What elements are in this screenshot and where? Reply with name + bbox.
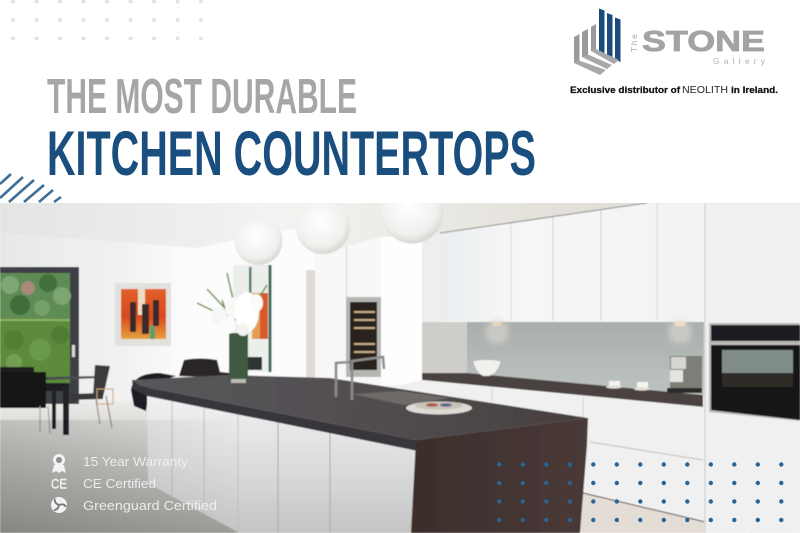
warranty label: 15 Year Warranty bbox=[83, 454, 189, 469]
back wall bbox=[0, 234, 62, 267]
bowl bbox=[473, 360, 501, 376]
second painting behind flowers bbox=[233, 265, 272, 372]
CE label: CE Certified bbox=[83, 476, 156, 491]
logo wordmark: STONE bbox=[642, 26, 765, 58]
pendant lamps bbox=[234, 203, 442, 266]
distributor tagline bbox=[570, 85, 778, 96]
distributor tagline: Exclusive distributor of bbox=[570, 85, 681, 96]
distributor tagline: in Ireland. bbox=[731, 85, 778, 96]
island base cabinets bbox=[147, 394, 416, 533]
logo: The Stone Gallery bbox=[570, 8, 778, 96]
waterfall end panel bbox=[411, 418, 588, 533]
garden window bbox=[0, 267, 79, 404]
kitchen photo bbox=[0, 180, 800, 533]
logo wordmark bbox=[629, 26, 766, 66]
logo wordmark: The bbox=[629, 33, 639, 52]
black lounge chairs bbox=[131, 358, 230, 411]
flower vase bbox=[197, 273, 267, 383]
distributor tagline: NEOLITH bbox=[682, 85, 728, 96]
title bbox=[47, 70, 536, 189]
diagonal stripes accent bbox=[0, 174, 61, 202]
decorative grey dot grid bbox=[11, 0, 203, 40]
icon: warranty ribbon bbox=[52, 454, 66, 473]
ceiling bbox=[0, 203, 800, 247]
built-in oven bbox=[709, 323, 800, 421]
back countertop bbox=[422, 373, 703, 407]
wall painting bbox=[115, 283, 171, 346]
logo wordmark: Gallery bbox=[713, 56, 766, 66]
icon: Greenguard seal bbox=[51, 497, 67, 513]
floor bbox=[0, 400, 240, 533]
backsplash bbox=[422, 320, 704, 395]
certifications list bbox=[51, 454, 217, 513]
icon: CE mark: CE bbox=[51, 476, 67, 492]
tall cabinets and recess bbox=[306, 233, 440, 385]
bottom-left shading bbox=[0, 420, 184, 533]
Greenguard label: Greenguard Certified bbox=[83, 498, 217, 513]
plate bbox=[406, 402, 472, 414]
lower cabinets bbox=[404, 379, 704, 461]
blue dot grid bbox=[497, 462, 784, 522]
wine cooler bbox=[346, 297, 381, 377]
tall right unit bbox=[703, 203, 800, 533]
espresso machine and cups bbox=[606, 356, 702, 393]
sink and tap bbox=[336, 357, 450, 405]
title line 1: THE MOST DURABLE bbox=[47, 70, 357, 124]
beige floor wedge bbox=[580, 494, 704, 533]
dining table and chairs bbox=[0, 365, 113, 435]
island worktop bbox=[132, 375, 588, 451]
logo mark bbox=[574, 8, 620, 75]
wall cabinets bbox=[440, 203, 705, 321]
side alcove wall bbox=[197, 227, 315, 385]
